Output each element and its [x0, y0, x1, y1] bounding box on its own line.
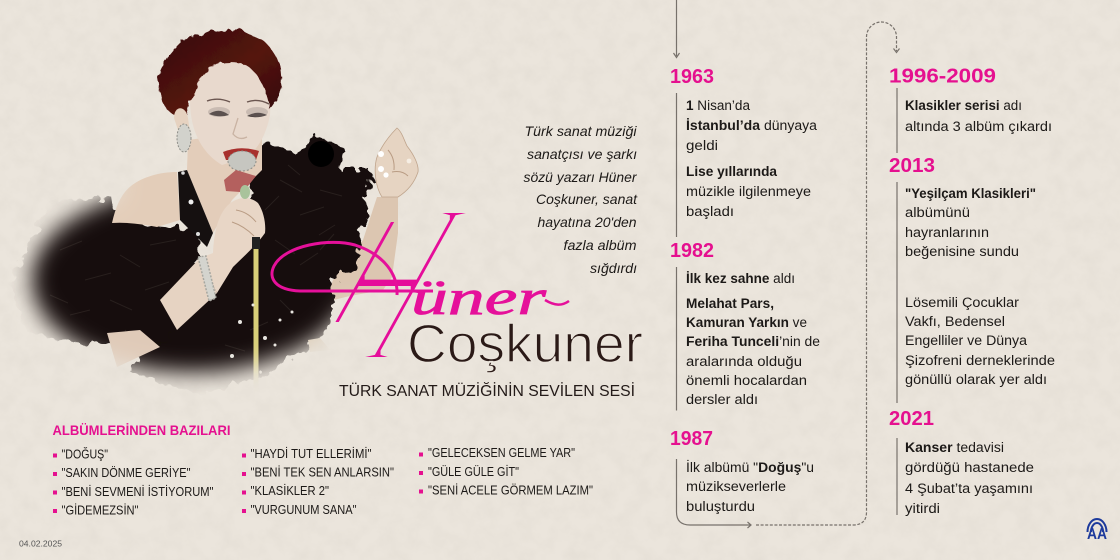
1982 entry — [670, 240, 820, 407]
neck and chest — [187, 130, 262, 233]
intro text block: hayatına 20'den — [538, 214, 637, 230]
1963 entry: müzikle ilgilenmeye — [686, 184, 811, 199]
2021 entry: 4 Şubat’ta yaşamını — [905, 481, 1033, 496]
1963 entry — [670, 66, 818, 219]
2013 entry — [889, 155, 1055, 387]
1996-2009 entry: altında 3 albüm çıkardı — [905, 119, 1052, 134]
timeline connectors — [674, 0, 900, 528]
albums heading: ALBÜMLERİNDEN BAZILARI — [52, 422, 230, 438]
2013 entry: hayranlarının — [905, 225, 989, 240]
album names column 2: "HAYDİ TUT ELLERİMİ" — [250, 447, 372, 461]
album names column 3: "GÜLE GÜLE GİT" — [428, 465, 519, 479]
1982 entry: önemli hocalardan — [686, 373, 807, 388]
album names column 3 — [428, 446, 593, 498]
1987 entry: 1987 — [670, 428, 713, 450]
name signature: Hüner: üner — [411, 269, 547, 325]
album names column 2 — [250, 447, 394, 517]
album names column 1: "GİDEMEZSİN" — [62, 504, 138, 518]
intro text block: sığdırdı — [590, 260, 637, 276]
microphone, rose and cable — [224, 151, 260, 395]
1982 entry: aralarında olduğu — [686, 354, 802, 369]
2021 entry — [889, 408, 1034, 516]
1996-2009 entry: Klasikler serisi adı — [905, 98, 1022, 113]
black feather boa and dress — [10, 137, 373, 395]
timeline column 2 — [889, 66, 1055, 516]
lower arm, hand and bracelet — [107, 198, 265, 367]
subtitle: TÜRK SANAT MÜZİĞİNİN SEVİLEN SESİ — [339, 381, 635, 400]
raised arm and fist — [325, 128, 418, 302]
1963 entry: 1963 — [670, 66, 714, 88]
album names column 1 — [62, 446, 214, 518]
1963 entry: İstanbul’da dünyaya — [686, 118, 818, 133]
2013 entry: albümünü — [905, 205, 970, 220]
intro text block: fazla albüm — [564, 237, 637, 253]
album names column 3: "SENİ ACELE GÖRMEM LAZIM" — [428, 484, 593, 498]
1982 entry: dersler aldı — [686, 392, 758, 407]
intro text block: Türk sanat müziği — [524, 123, 637, 139]
2013 entry: Lösemili Çocuklar — [905, 295, 1020, 310]
2013 entry: Şizofreni derneklerinde — [905, 353, 1055, 368]
feather highlights — [50, 165, 342, 351]
album names column 2: "VURGUNUM SANA" — [250, 503, 356, 517]
name signature: Hüner: H — [264, 152, 512, 413]
1996-2009 entry: 1996-2009 — [889, 66, 996, 88]
album names column 3: "GELECEKSEN GELME YAR" — [428, 446, 575, 460]
icon: agency logo — [1087, 519, 1107, 543]
dress sequins and lower details — [230, 304, 330, 358]
2021 entry: 2021 — [889, 408, 934, 430]
2013 entry: Vakfı, Bedensel — [905, 314, 1005, 329]
1987 entry: müzikseverlerle — [686, 479, 786, 494]
2013 entry: gönüllü olarak yer aldı — [905, 372, 1047, 387]
album bullets — [53, 452, 423, 513]
1963 entry: başladı — [686, 204, 734, 219]
intro text block: sanatçısı ve şarkı — [527, 146, 637, 162]
album names column 1: "DOĞUŞ" — [62, 446, 108, 462]
1963 entry: geldi — [686, 138, 718, 153]
album names column 2: "BENİ TEK SEN ANLARSIN" — [250, 466, 394, 480]
album names column 2: "KLASİKLER 2" — [250, 484, 329, 498]
2013 entry: 2013 — [889, 155, 935, 177]
album names column 1: "BENİ SEVMENİ İSTİYORUM" — [62, 485, 214, 499]
2021 entry: gördüğü hastanede — [905, 460, 1034, 475]
surname: Coşkuner: Coşkuner — [407, 314, 643, 374]
1982 entry: Kamuran Yarkın ve — [686, 315, 807, 330]
portrait illustration of the singer — [10, 28, 418, 395]
2013 entry: Engelliler ve Dünya — [905, 333, 1028, 348]
2013 entry: beğenisine sundu — [905, 244, 1019, 259]
timeline column 1 — [670, 66, 820, 514]
intro text block: Coşkuner, sanat — [536, 191, 638, 207]
1987 entry — [670, 428, 814, 514]
1963 entry: 1 Nisan’da — [686, 98, 750, 113]
dress strap with sequins — [178, 170, 213, 247]
1982 entry: Melahat Pars, — [686, 296, 774, 311]
2021 entry: yitirdi — [905, 501, 940, 516]
2021 entry: Kanser tedavisi — [905, 440, 1004, 455]
icon: agency logo: AA — [1087, 526, 1107, 543]
1982 entry: İlk kez sahne aldı — [686, 271, 795, 286]
1982 entry: Feriha Tunceli’nin de — [686, 334, 820, 349]
albums list — [52, 422, 593, 518]
intro text block: sözü yazarı Hüner — [524, 169, 638, 185]
date: 04.02.2025 — [19, 538, 62, 548]
1963 entry: Lise yıllarında — [686, 164, 777, 179]
1987 entry: İlk albümü "Doğuş"u — [686, 460, 814, 475]
album names column 1: "SAKIN DÖNME GERİYE" — [62, 466, 190, 480]
1982 entry: 1982 — [670, 240, 714, 262]
1996-2009 entry — [889, 66, 1052, 134]
2013 entry: "Yeşilçam Klasikleri" — [905, 186, 1036, 201]
face, hair and earring — [158, 28, 282, 165]
1987 entry: buluşturdu — [686, 499, 755, 514]
name signature: Hüner — [270, 213, 570, 357]
bare shoulder — [112, 172, 180, 227]
intro text block — [524, 123, 638, 276]
